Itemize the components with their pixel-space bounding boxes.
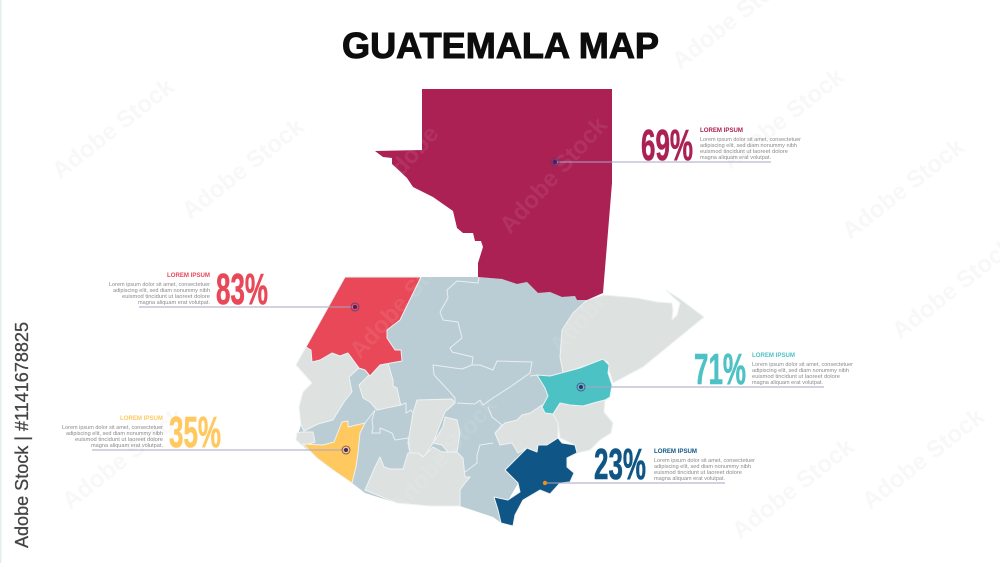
map watermarks: Adobe Stock	[384, 391, 503, 519]
map of Guatemala	[296, 89, 704, 526]
background watermarks: Adobe Stock	[47, 73, 180, 185]
region: southeast grey	[495, 405, 558, 453]
body text: adipiscing elit, sed diam nonummy nibh	[66, 431, 163, 437]
body text: magna aliquam erat volutpat.	[700, 155, 771, 161]
body text	[654, 458, 755, 482]
body text: adipiscing elit, sed diam nonummy nibh	[752, 368, 849, 374]
marker	[577, 383, 585, 391]
percentage: 69%	[641, 121, 693, 170]
region: Santa Rosa dark blue	[494, 438, 577, 526]
background watermarks: Adobe Stock	[177, 113, 310, 225]
marker	[342, 446, 350, 454]
body text: euismod tincidunt ut laoreet dolore	[752, 374, 840, 380]
marker	[351, 303, 359, 311]
heading: LOREM IPSUM	[120, 415, 163, 422]
region: central grey two	[433, 417, 460, 452]
callout: 23% dark blue	[543, 440, 755, 489]
percentage: 35%	[169, 408, 221, 457]
region: central blue departments	[296, 277, 587, 522]
percentage: 83%	[216, 265, 268, 314]
map watermarks: Adobe	[374, 120, 444, 194]
region: small west grey	[296, 432, 315, 446]
map watermarks: Adobe Stock	[494, 111, 613, 239]
body text: Lorem ipsum dolor sit amet, consectetuer	[62, 425, 163, 431]
body text: magna aliquam erat volutpat.	[654, 476, 725, 482]
heading: LOREM IPSUM	[167, 272, 210, 279]
heading: LOREM IPSUM	[700, 127, 743, 134]
background watermarks: Adobe Stock	[717, 63, 850, 175]
body text: Lorem ipsum dolor sit amet, consectetuer	[109, 282, 210, 288]
body text: euismod tincidunt ut laoreet dolore	[122, 294, 210, 300]
body text: adipiscing elit, sed diam nonummy nibh	[654, 464, 751, 470]
background watermarks: Adobe Stock	[57, 403, 190, 515]
callout: 71% teal	[577, 345, 853, 394]
body text: euismod tincidunt ut laoreet dolore	[75, 437, 163, 443]
body text: magna aliquam erat volutpat.	[138, 300, 210, 306]
body text: Lorem ipsum dolor sit amet, consectetuer	[654, 458, 755, 464]
body text: euismod tincidunt ut laoreet dolore	[700, 149, 788, 155]
department border lines	[365, 277, 537, 472]
background watermarks: Adobe Stock	[857, 403, 990, 515]
body text	[752, 362, 853, 386]
region: Huehuetenango red	[306, 277, 421, 376]
marker	[543, 481, 547, 485]
heading: LOREM IPSUM	[752, 352, 795, 359]
background watermarks: Adobe Stock	[837, 133, 970, 245]
region: south grey	[365, 447, 470, 506]
region: Quetzaltenango yellow	[303, 421, 365, 483]
callout: 35% yellow	[62, 408, 350, 457]
region: Peten maroon	[375, 89, 612, 300]
body text	[700, 137, 801, 161]
percentage: 23%	[594, 440, 646, 489]
stock id label: Adobe Stock | #1141678825	[12, 322, 32, 548]
body text: Lorem ipsum dolor sit amet, consectetuer	[700, 137, 801, 143]
body text: adipiscing elit, sed diam nonummy nibh	[700, 143, 797, 149]
callout: 69% maroon	[551, 121, 801, 170]
body text	[109, 282, 210, 306]
map watermarks	[344, 111, 614, 519]
region: northeast grey	[560, 290, 704, 383]
body text: euismod tincidunt ut laoreet dolore	[654, 470, 742, 476]
region: northwest grey	[296, 347, 359, 431]
region: central grey	[408, 399, 455, 457]
title: GUATEMALA MAP	[342, 25, 659, 66]
region: Izabal-Zacapa teal	[537, 359, 612, 414]
heading: LOREM IPSUM	[654, 448, 697, 455]
body text	[62, 425, 163, 449]
body text: adipiscing elit, sed diam nonummy nibh	[113, 288, 210, 294]
region: east grey	[553, 400, 613, 453]
body text: Lorem ipsum dolor sit amet, consectetuer	[752, 362, 853, 368]
callout: 83% red	[109, 265, 359, 314]
map watermarks: Adobe	[544, 285, 614, 359]
region: central-west grey	[359, 363, 401, 410]
body text: magna aliquam erat volutpat.	[91, 443, 163, 449]
marker	[551, 158, 559, 166]
background watermarks: Adobe Stock	[727, 433, 860, 545]
body text: magna aliquam erat volutpat.	[752, 380, 823, 386]
percentage: 71%	[694, 345, 746, 394]
map watermarks: Adobe Stock	[344, 236, 463, 364]
